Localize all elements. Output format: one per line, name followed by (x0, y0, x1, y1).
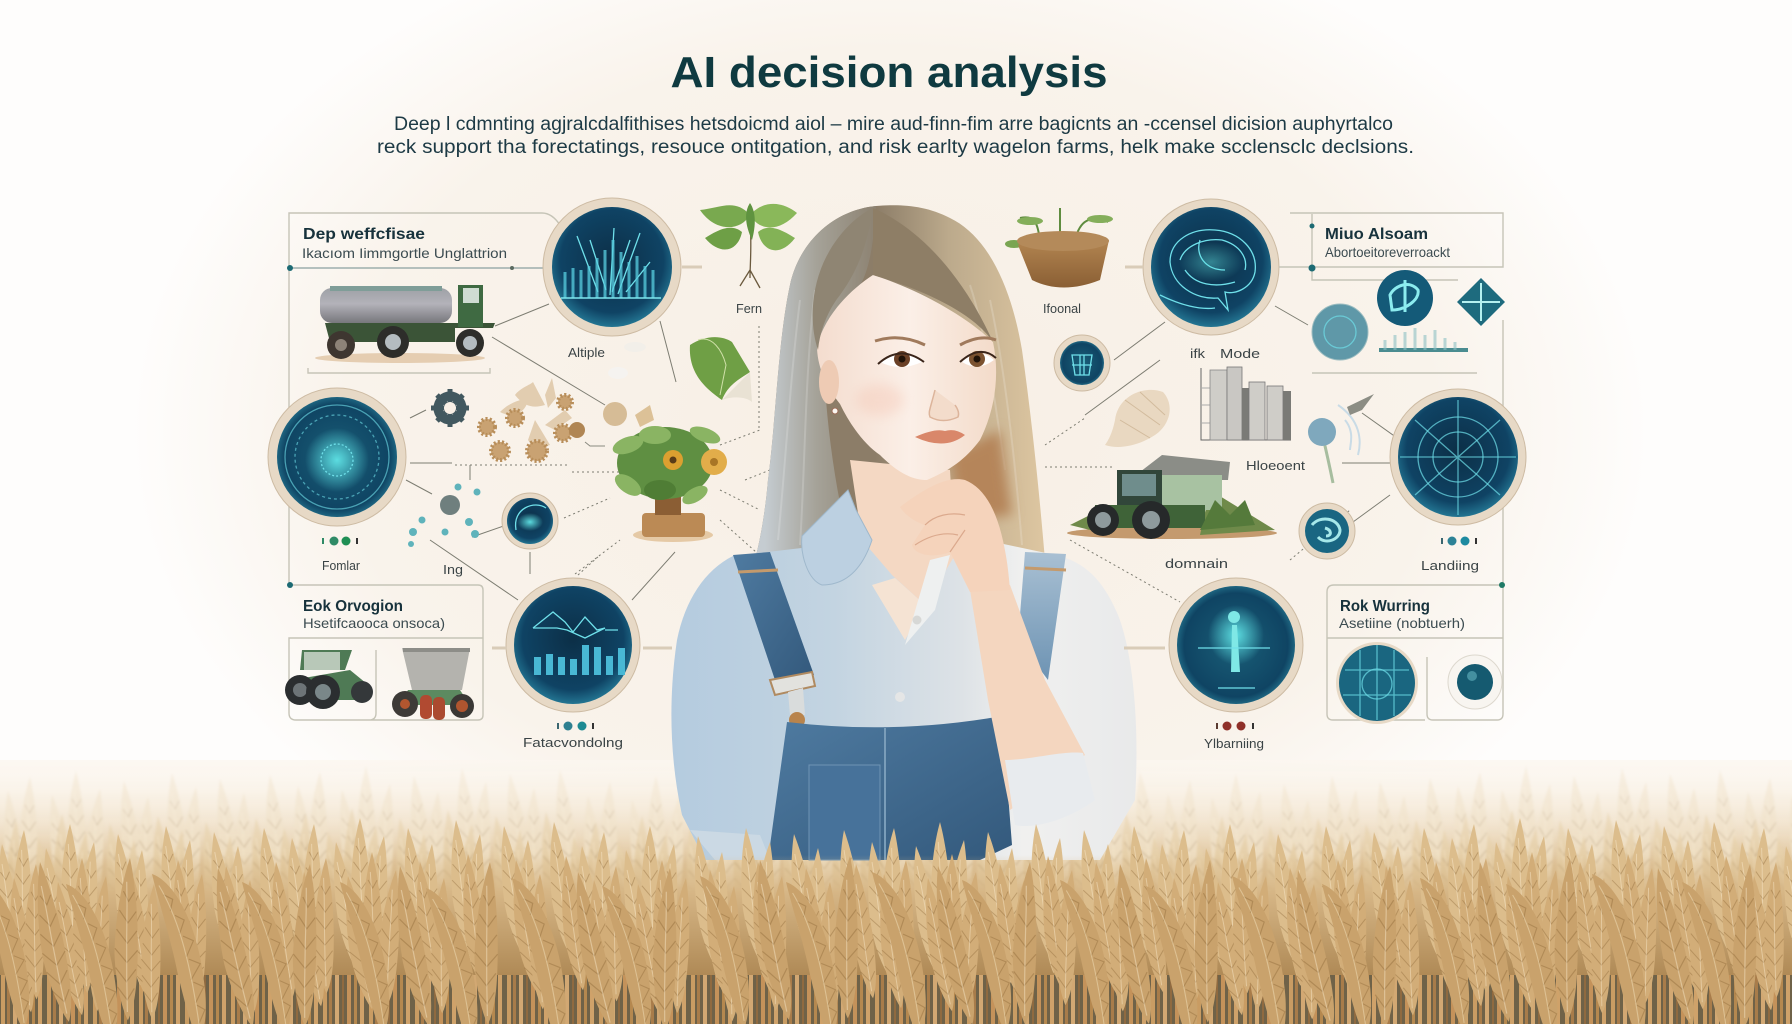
right strap (1018, 552, 1066, 680)
icon: seeds and dried flowers (479, 342, 654, 461)
HUD circle: forecast (492, 578, 672, 712)
icon: dandelion and bird (1308, 394, 1374, 483)
buckle (770, 672, 815, 728)
title: AI decision analysis (670, 48, 1108, 97)
label: Hloeoent: Hloeoent (1246, 458, 1305, 473)
panel: bottom-left orvogion: Hsetifcaooca onsoca) (303, 615, 445, 631)
icon: gear (431, 389, 469, 427)
back wheat field (0, 760, 1792, 1024)
front wheat field (0, 818, 1792, 1024)
icon: potted plant (610, 423, 727, 542)
subtitle text: Deep l cdmnting agjralcdalfithises hetsdoicmd aiol – mire aud-finn-fim arre bagicnts an -ccensel dicision auphyrtalco (394, 114, 1393, 135)
HUD circle: warning target (1124, 578, 1303, 712)
label: Model: ifk (1190, 346, 1206, 361)
icon: tanker truck (315, 285, 495, 363)
connectors top-left (406, 304, 770, 600)
label: Normal: Ifoonal (1043, 301, 1081, 316)
panel: deep welfare header: Ikacıom Iimmgortle Unglattrion (302, 245, 507, 261)
open collar and placket (872, 578, 925, 640)
icon: basket plant (1005, 208, 1113, 288)
icon: grain husk (1105, 390, 1170, 447)
label: Ing: Ing (443, 562, 463, 577)
bib (768, 716, 1012, 860)
HUD circle: small bucket (1054, 335, 1110, 391)
label: warning: Ylbarniing (1204, 736, 1264, 751)
icon: grid globe (1336, 642, 1418, 724)
arm (970, 585, 1085, 810)
bar chart (1201, 367, 1291, 440)
label: forecasting: Fatacvondolng (523, 735, 623, 750)
legend dots: forecast (557, 722, 594, 730)
hair back (755, 205, 1045, 560)
label: Fern: Fern (736, 301, 762, 316)
legend dots: Landing (1441, 536, 1477, 546)
HUD circle: small swirl (1299, 503, 1355, 559)
panel: model algorithm header: Abortoeitoreverroackt (1325, 244, 1450, 260)
icon: green tractor (285, 650, 373, 709)
icon: fern plant (700, 203, 797, 288)
label: Fomlar: Fomlar (322, 558, 361, 573)
icons: small model spheres (1312, 270, 1505, 360)
icon: harvester with plants (1067, 455, 1277, 539)
label: Landing: Landiing (1421, 558, 1479, 573)
brows and eyes (875, 338, 996, 367)
label: Model: Mode (1220, 346, 1260, 361)
label: Altiple: Altiple (568, 345, 605, 360)
lower sleeve (690, 830, 770, 860)
neck shadow (950, 430, 1012, 520)
hair left (755, 206, 876, 560)
neck (850, 460, 955, 605)
HUD circle: radar (1390, 389, 1526, 525)
hand (900, 479, 1010, 592)
panel: deep welfare header: Dep weffcfisae (303, 226, 425, 243)
icon: leaf (690, 337, 752, 402)
panel: model algorithm header (1290, 213, 1503, 585)
panel: bottom-left orvogion (287, 582, 483, 720)
icon: network dots (408, 484, 480, 547)
label: Model (1190, 346, 1260, 361)
left strap (733, 552, 814, 680)
panel: risk warning: Asetiine (nobtuerh) (1339, 615, 1465, 631)
HUD circle: brain model (1125, 199, 1312, 335)
HUD circle: small left (502, 493, 558, 549)
label: domain: domnain (1165, 556, 1228, 571)
legend dots: Fomlar (322, 536, 358, 546)
face (817, 275, 996, 480)
connectors right (1045, 306, 1400, 602)
panel: deep welfare header (287, 213, 560, 585)
cuff (1005, 752, 1095, 826)
ear (819, 360, 839, 404)
subtitle text (377, 114, 1414, 158)
icon: small sphere (1448, 655, 1502, 709)
HUD circle: data core (268, 388, 406, 526)
nose and mouth (929, 390, 959, 420)
icon: hopper machine (392, 648, 474, 720)
panel: bottom-left orvogion: Eok Orvogion (303, 598, 403, 615)
legend dots: warning (1216, 722, 1254, 730)
buttons (912, 616, 922, 624)
HUD circle: analysis chart (543, 198, 702, 336)
figure: woman farmer (671, 205, 1136, 860)
hair strands (778, 285, 1022, 545)
panel: risk warning (1327, 582, 1505, 724)
panel: risk warning: Rok Wurring (1340, 598, 1430, 615)
hair front sweep (813, 208, 873, 350)
panel: model algorithm header: Miuo Alsoam (1325, 226, 1428, 243)
shirt (671, 540, 1136, 860)
subtitle text: reck support tha forectatings, resouce ontitgation, and risk earlty wagelon farms, helk make scclensclc declsions. (377, 137, 1414, 158)
